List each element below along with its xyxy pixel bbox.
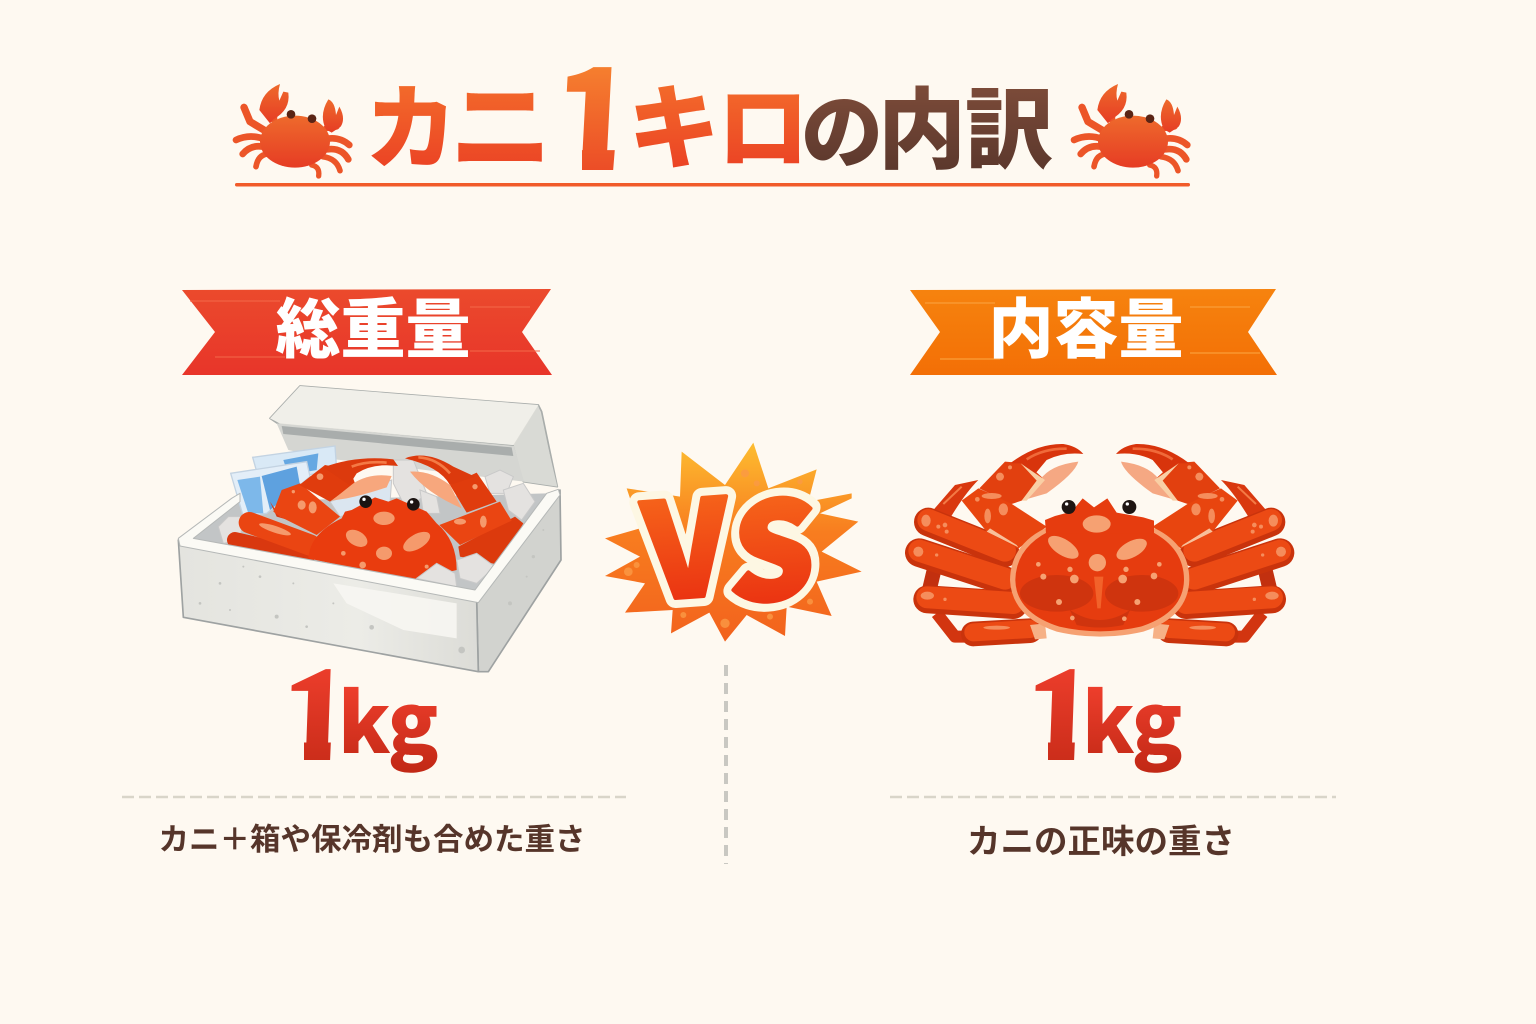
ice chunks <box>218 460 535 543</box>
value: 1kg: 1 <box>1020 619 1100 796</box>
title: の <box>801 66 883 185</box>
VS text: V <box>635 441 736 638</box>
icon: VS burst <box>605 441 862 642</box>
title: キ <box>628 55 720 188</box>
ice packs <box>231 446 337 517</box>
ribbon: 内容量: 内容量 <box>988 277 1184 371</box>
vertical divider <box>724 665 728 864</box>
value: 1kg: kg <box>1082 657 1182 777</box>
box rim and faces <box>477 490 561 672</box>
title underline <box>235 183 1190 186</box>
description: カニ＋箱や保冷剤も合めた重さ <box>158 815 586 859</box>
title: ロ <box>717 55 809 188</box>
box lid <box>270 386 557 487</box>
left claw <box>273 483 340 535</box>
title <box>371 67 1052 170</box>
illustration: foam box with crab <box>178 386 561 672</box>
title: 1 <box>547 10 641 210</box>
eyes <box>1062 500 1076 514</box>
title: ニ <box>450 47 552 194</box>
panel: total weight <box>158 277 586 859</box>
VS text <box>635 441 823 642</box>
illustration: crab <box>913 444 1286 639</box>
title: 訳 <box>965 60 1053 187</box>
value: 1kg: kg <box>338 657 438 777</box>
box interior <box>193 493 547 590</box>
VS text: S <box>725 441 823 642</box>
description: カニの正味の重さ <box>967 814 1235 863</box>
carapace <box>1010 498 1189 637</box>
value: 1kg <box>1036 669 1182 773</box>
crab in box <box>235 456 523 587</box>
title: カ <box>365 55 457 188</box>
VS text: V <box>635 441 736 638</box>
ribbon: 総重量 <box>182 277 552 375</box>
value: 1kg: 1 <box>276 619 356 796</box>
ribbon: 総重量: 総重量 <box>275 277 471 371</box>
right claw <box>450 473 497 513</box>
panel: net weight <box>910 277 1286 863</box>
icon: left title crab <box>236 84 349 176</box>
ribbon: 内容量 <box>910 277 1277 375</box>
value: 1kg <box>292 669 438 773</box>
VS text: S <box>725 441 823 642</box>
icon: right title crab <box>1074 84 1187 176</box>
carapace <box>308 497 457 581</box>
title: 内 <box>878 60 966 187</box>
